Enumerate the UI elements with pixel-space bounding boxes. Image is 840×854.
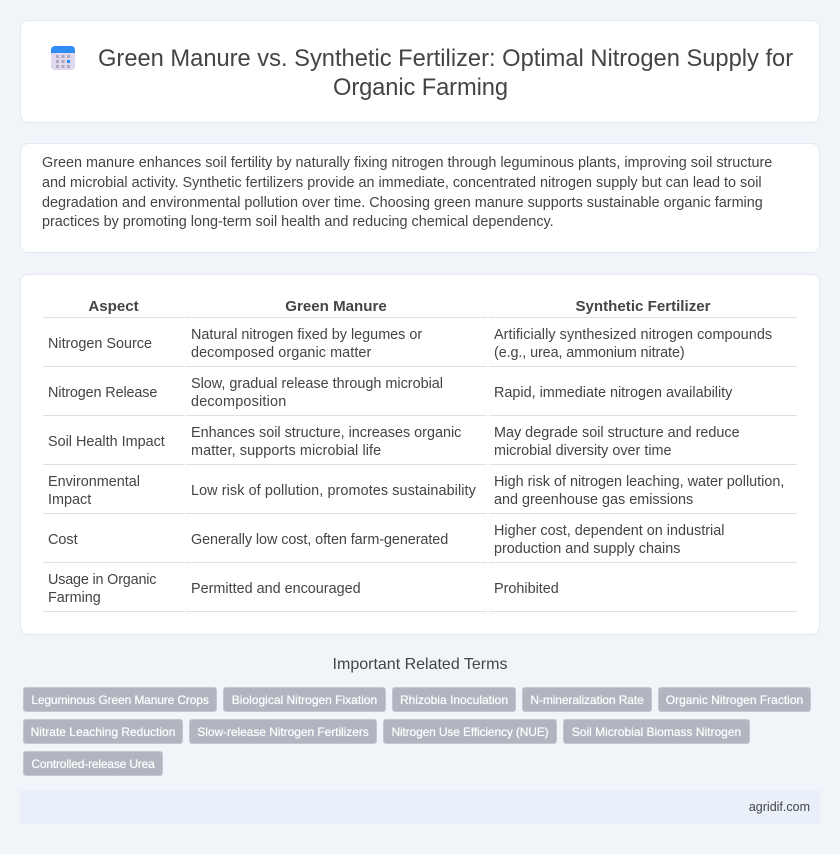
cell — [494, 474, 784, 508]
cell: (e.g., urea, ammonium nitrate) — [494, 345, 685, 361]
tag — [223, 687, 386, 712]
tag — [23, 751, 163, 776]
title: Green Manure vs. Synthetic Fertilizer: Optimal Nitrogen Supply for — [98, 46, 793, 72]
row: usage in organic farming — [48, 572, 156, 606]
row: environmental impact: Environmental — [48, 474, 140, 490]
cell — [191, 425, 461, 459]
cell: decomposition — [191, 394, 286, 410]
cell: Generally low cost, often farm-generated — [191, 532, 448, 548]
row: environmental impact: Impact — [48, 492, 91, 508]
tag — [563, 719, 750, 744]
cell: Artificially synthesized nitrogen compounds — [494, 327, 772, 343]
tag — [658, 687, 811, 712]
tag: Leguminous Green Manure Crops — [31, 693, 209, 707]
cell — [494, 425, 740, 459]
cell: decomposed organic matter — [191, 345, 371, 361]
table header: synthetic fertilizer: Synthetic Fertilizer — [575, 298, 711, 315]
footer source: agridif.com — [749, 800, 810, 814]
cell: Higher cost, dependent on industrial — [494, 523, 724, 539]
cell: matter, supports microbial life — [191, 443, 381, 459]
cell — [191, 327, 422, 361]
cell: and greenhouse gas emissions — [494, 492, 693, 508]
table header: aspect: Aspect — [88, 298, 139, 315]
tag — [522, 687, 652, 712]
icon: calendar — [51, 46, 75, 70]
cell: Low risk of pollution, promotes sustainability — [191, 483, 476, 499]
cell: Slow, gradual release through microbial — [191, 376, 443, 392]
cell: microbial diversity over time — [494, 443, 672, 459]
tag — [23, 687, 217, 712]
row: usage in organic farming: Farming — [48, 590, 101, 606]
intro text: and microbial activity. Synthetic fertilizers provide an immediate, concentrated nitrogen supply but can lead to soil — [42, 175, 762, 191]
row: usage in organic farming: Usage in Organic — [48, 572, 156, 588]
title — [98, 46, 793, 101]
cell: Prohibited — [494, 581, 559, 597]
cell: Permitted and encouraged — [191, 581, 361, 597]
intro text — [42, 155, 772, 230]
tag: Biological Nitrogen Fixation — [232, 693, 377, 707]
row: cost: Cost — [48, 532, 78, 548]
intro text: Green manure enhances soil fertility by naturally fixing nitrogen through leguminous plants, improving soil structure — [42, 155, 772, 171]
title: Organic Farming — [333, 75, 508, 101]
intro text: degradation and environmental pollution over time. Choosing green manure supports sustainable organic farming — [42, 195, 763, 211]
cell — [191, 376, 443, 410]
tag: Controlled-release Urea — [31, 757, 155, 771]
cell: Enhances soil structure, increases organic — [191, 425, 461, 441]
cell: Rapid, immediate nitrogen availability — [494, 385, 732, 401]
intro panel — [20, 143, 820, 253]
row: environmental impact — [48, 474, 140, 508]
tag: Nitrate Leaching Reduction — [31, 725, 175, 739]
tag: Nitrogen Use Efficiency (NUE) — [391, 725, 549, 739]
tag — [392, 687, 516, 712]
cell: production and supply chains — [494, 541, 680, 557]
table header: green manure: Green Manure — [285, 298, 387, 315]
cell: Natural nitrogen fixed by legumes or — [191, 327, 422, 343]
tag: Slow-release Nitrogen Fertilizers — [197, 725, 369, 739]
cell — [494, 523, 724, 557]
cell: May degrade soil structure and reduce — [494, 425, 740, 441]
row: nitrogen release: Nitrogen Release — [48, 385, 157, 401]
footer bar — [20, 790, 820, 824]
row: soil health impact: Soil Health Impact — [48, 434, 165, 450]
tag: Organic Nitrogen Fraction — [666, 693, 803, 707]
comparison table panel — [20, 274, 820, 635]
cell — [494, 327, 772, 361]
intro text: practices by promoting long-term soil health and reducing chemical dependency. — [42, 214, 554, 230]
tag — [23, 719, 183, 744]
tag — [383, 719, 557, 744]
tag — [189, 719, 377, 744]
cell: High risk of nitrogen leaching, water pollution, — [494, 474, 784, 490]
row: nitrogen source: Nitrogen Source — [48, 336, 152, 352]
tag: N-mineralization Rate — [530, 693, 644, 707]
tag: Soil Microbial Biomass Nitrogen — [572, 725, 741, 739]
related terms heading: Important Related Terms — [333, 656, 507, 673]
tag: Rhizobia Inoculation — [400, 693, 508, 707]
header panel — [20, 20, 820, 123]
